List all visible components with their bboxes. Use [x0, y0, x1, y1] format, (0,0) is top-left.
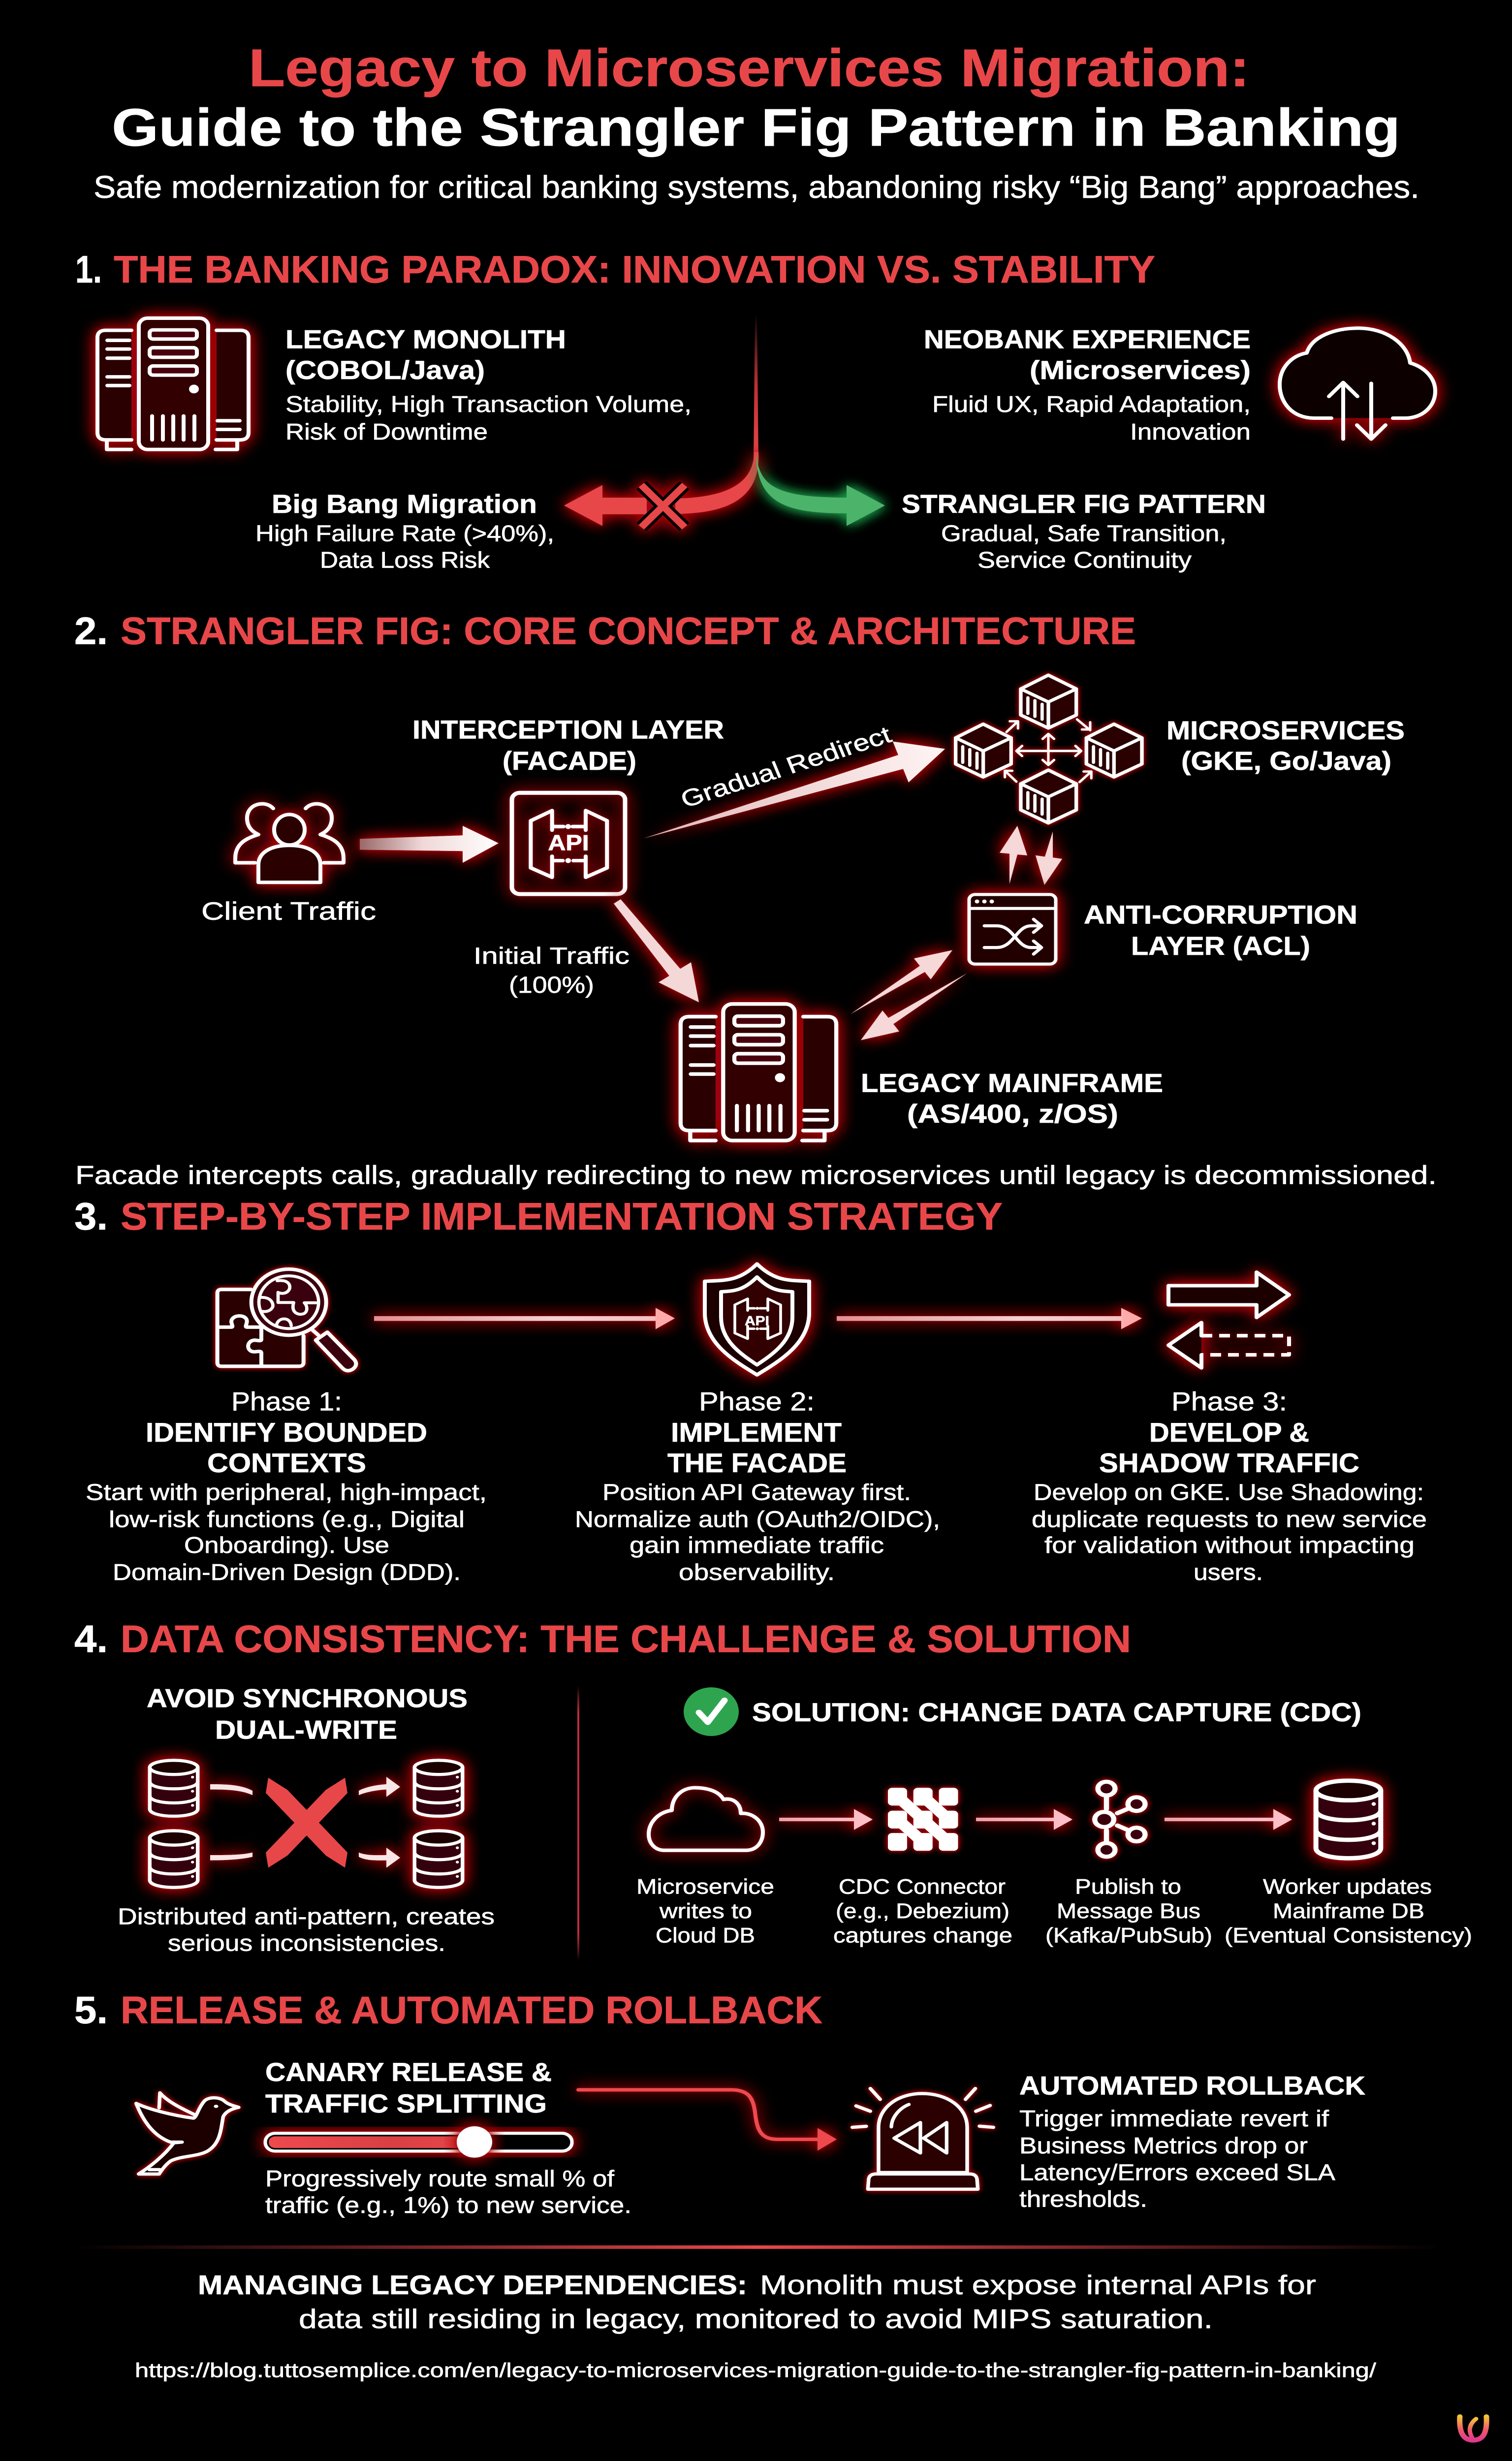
panel: dual-write anti-pattern [118, 1684, 495, 1956]
icon: green check [684, 1687, 739, 1736]
icon: puzzle and magnifier [218, 1269, 356, 1371]
text: automated rollback: Trigger immediate revert if [1019, 2107, 1329, 2131]
text: phase 3: DEVELOP & [1149, 1418, 1309, 1448]
text: big bang migration: Big Bang Migration [272, 489, 537, 518]
icon: legacy mainframe [681, 1004, 836, 1140]
text: canary release heading: CANARY RELEASE & [265, 2057, 552, 2086]
panel: section 4 data consistency [74, 1617, 1472, 1960]
text: phase 3: users. [1194, 1560, 1263, 1585]
text: worker step: Worker updates [1263, 1875, 1432, 1898]
text: microservice step: Cloud DB [656, 1924, 755, 1947]
text: big bang migration: High Failure Rate (>40%), [255, 521, 554, 546]
panel: section 5 release and rollback [74, 1989, 1365, 2218]
text: connector step: CDC Connector [839, 1875, 1006, 1898]
text: connector step: captures change [833, 1924, 1012, 1947]
arrow: phase 2 to phase 3 [837, 1308, 1142, 1329]
text: microservice step: Microservice [636, 1875, 774, 1898]
text: phase 3: Phase 3: [1171, 1387, 1287, 1416]
arrows: ACL and microservices exchange [1000, 826, 1062, 885]
text: connector step [833, 1875, 1012, 1947]
arrows: dual writes [210, 1777, 400, 1868]
text: neobank experience [924, 325, 1251, 444]
text: phase 1: low-risk functions (e.g., Digital [109, 1507, 465, 1532]
text: phase 2: Position API Gateway first. [602, 1480, 911, 1505]
text: publish step [1045, 1875, 1212, 1947]
heading: section 2: 2. [74, 610, 108, 653]
text: neobank experience: (Microservices) [1030, 355, 1251, 384]
text: strangler fig pattern [902, 489, 1266, 573]
label: microservices: (GKE, Go/Java) [1181, 746, 1391, 775]
text: phase 2: IMPLEMENT [671, 1418, 842, 1448]
text: phase 2: observability. [679, 1560, 835, 1585]
text: phase 3 [1032, 1387, 1427, 1585]
label: anti-corruption layer [1084, 900, 1357, 960]
text: neobank experience: NEOBANK EXPERIENCE [924, 325, 1251, 354]
icon: source databases [150, 1761, 198, 1888]
arrow: connector to bus [976, 1809, 1072, 1830]
label: client traffic: Client Traffic [201, 897, 376, 925]
icon: anti-corruption layer [969, 894, 1056, 964]
text: legacy monolith [285, 325, 692, 444]
arrow: cloud to connector [779, 1809, 873, 1830]
panel: section 1 banking paradox [75, 248, 1435, 573]
title [112, 38, 1400, 157]
heading: avoid dual-write: AVOID SYNCHRONOUS [147, 1684, 468, 1713]
label: legacy mainframe [861, 1069, 1163, 1128]
text: automated rollback: AUTOMATED ROLLBACK [1019, 2071, 1365, 2100]
text: canary release heading [265, 2057, 552, 2118]
text: phase 3: duplicate requests to new service [1032, 1507, 1427, 1532]
heading: section 2: STRANGLER FIG: CORE CONCEPT & ARCHITECTURE [121, 610, 1136, 653]
label: interception layer: INTERCEPTION LAYER [412, 715, 724, 744]
title: Guide to the Strangler Fig Pattern in Banking [112, 98, 1400, 157]
icon: microservices cubes [956, 675, 1142, 823]
text: worker step: (Eventual Consistency) [1225, 1924, 1472, 1947]
heading: section 1: 1. [75, 248, 102, 291]
text: microservice step [636, 1875, 774, 1947]
text: neobank experience: Fluid UX, Rapid Adaptation, [932, 392, 1251, 417]
text: worker step [1225, 1875, 1472, 1947]
text: legacy monolith: Stability, High Transaction Volume, [285, 392, 692, 417]
text: canary description [265, 2167, 631, 2218]
arrow: facade to legacy [614, 899, 699, 1002]
arrow: phase 1 to phase 2 [374, 1308, 675, 1329]
text: automated rollback: Latency/Errors exceed SLA [1019, 2160, 1335, 2185]
label: microservices: MICROSERVICES [1166, 716, 1405, 745]
text: canary description: Progressively route small % of [265, 2167, 614, 2191]
icon: cloud DB [649, 1788, 763, 1850]
callout: managing legacy dependencies: Monolith must expose internal APIs for [760, 2270, 1316, 2300]
text: phase 2: Normalize auth (OAuth2/OIDC), [575, 1507, 940, 1532]
text: phase 1: Domain-Driven Design (DDD). [113, 1560, 461, 1585]
icon: brand logo [1460, 2417, 1486, 2440]
callout: managing legacy dependencies: data still residing in legacy, monitored to avoid MIPS saturation. [299, 2304, 1213, 2334]
label: legacy mainframe: LEGACY MAINFRAME [861, 1069, 1163, 1098]
label: interception layer [412, 715, 724, 775]
text: connector step: (e.g., Debezium) [836, 1899, 1009, 1923]
text: facade summary: Facade intercepts calls, gradually redirecting to new microservices until legacy is decommissioned. [75, 1161, 1437, 1190]
text: canary description: traffic (e.g., 1%) to new service. [265, 2193, 631, 2218]
heading: avoid dual-write [147, 1684, 468, 1744]
heading: CDC solution: SOLUTION: CHANGE DATA CAPTURE (CDC) [752, 1698, 1361, 1727]
icon: CDC connector [888, 1788, 958, 1851]
label: legacy mainframe: (AS/400, z/OS) [907, 1099, 1118, 1128]
text: legacy monolith: (COBOL/Java) [285, 355, 485, 384]
panel: section 2 core concept and architecture [74, 610, 1437, 1190]
label: initial traffic [473, 943, 630, 998]
arrows: legacy and ACL exchange [850, 950, 967, 1040]
text: neobank experience: Innovation [1130, 420, 1251, 444]
arrow: client to facade [360, 826, 499, 863]
text: phase 2: gain immediate traffic [630, 1533, 884, 1558]
text: phase 3: Develop on GKE. Use Shadowing: [1034, 1480, 1424, 1505]
text: phase 2: Phase 2: [699, 1387, 815, 1416]
source URL: https://blog.tuttosemplice.com/en/legacy-to-microservices-migration-guide-to-the-strangler-fig-pattern-in-banking/ [135, 2360, 1377, 2382]
chart: traffic slider [265, 2126, 572, 2158]
icon: API facade [512, 793, 625, 894]
text: canary release heading: TRAFFIC SPLITTING [265, 2089, 547, 2118]
icon: API shield [705, 1264, 809, 1375]
label: gradual redirect: Gradual Redirect [677, 721, 895, 813]
text: phase 1 [86, 1387, 487, 1585]
text: automated rollback [1019, 2071, 1365, 2212]
text: phase 1: Phase 1: [231, 1387, 342, 1416]
label: anti-corruption layer: LAYER (ACL) [1131, 931, 1310, 960]
callout: managing legacy dependencies [198, 2270, 1316, 2334]
text: microservice step: writes to [659, 1899, 752, 1923]
label: initial traffic: Initial Traffic [473, 943, 630, 969]
text: strangler fig pattern: Gradual, Safe Transition, [941, 521, 1227, 546]
label: anti-corruption layer: ANTI-CORRUPTION [1084, 900, 1357, 929]
label: microservices [1166, 716, 1405, 775]
text: big bang migration [255, 489, 554, 573]
arrow: canary to rollback [578, 2090, 837, 2150]
heading: section 1: THE BANKING PARADOX: INNOVATION VS. STABILITY [114, 248, 1155, 291]
text: anti-pattern note: serious inconsistencies. [168, 1931, 445, 1956]
subtitle: Safe modernization for critical banking systems, abandoning risky “Big Bang” approaches. [94, 170, 1419, 205]
text: phase 1: Start with peripheral, high-impact, [86, 1480, 487, 1505]
text: phase 1: Onboarding). Use [184, 1533, 389, 1558]
text: phase 1: IDENTIFY BOUNDED [146, 1418, 427, 1448]
panel: section 3 implementation strategy [74, 1195, 1427, 1585]
arrow: bus to worker [1165, 1809, 1292, 1830]
text: publish step: Message Bus [1057, 1899, 1200, 1923]
arrow: failed big bang path [564, 452, 758, 527]
text: publish step: (Kafka/PubSub) [1045, 1924, 1212, 1947]
panel: CDC solution [636, 1687, 1472, 1947]
icon: rollback alarm [852, 2088, 993, 2189]
text: phase 3: SHADOW TRAFFIC [1099, 1448, 1359, 1478]
text: anti-pattern note [118, 1904, 495, 1956]
text: phase 2 [575, 1387, 940, 1585]
label: initial traffic: (100%) [509, 972, 594, 998]
heading: avoid dual-write: DUAL-WRITE [215, 1715, 397, 1744]
text: worker step: Mainframe DB [1273, 1899, 1424, 1923]
icon: mainframe database [1316, 1781, 1381, 1858]
icon: red cross [266, 1778, 347, 1868]
icon: client users [235, 804, 344, 883]
text: strangler fig pattern: Service Continuity [977, 548, 1192, 573]
icon: legacy server [97, 318, 249, 449]
text: anti-pattern note: Distributed anti-pattern, creates [118, 1904, 495, 1929]
label: interception layer: (FACADE) [503, 746, 636, 775]
heading: section 4: DATA CONSISTENCY: THE CHALLENGE & SOLUTION [121, 1617, 1131, 1660]
icon: API shield: API [745, 1313, 769, 1328]
title: Legacy to Microservices Migration: [249, 38, 1250, 97]
text: publish step: Publish to [1075, 1875, 1181, 1898]
arrow: gradual redirect [643, 742, 945, 838]
icon: target databases [414, 1761, 463, 1888]
text: automated rollback: thresholds. [1019, 2187, 1147, 2212]
text: legacy monolith: LEGACY MONOLITH [285, 325, 566, 354]
callout: managing legacy dependencies: MANAGING LEGACY DEPENDENCIES: [198, 2270, 747, 2300]
text: legacy monolith: Risk of Downtime [285, 420, 488, 444]
icon: API facade: API [548, 830, 589, 855]
heading: section 3: STEP-BY-STEP IMPLEMENTATION STRATEGY [121, 1195, 1003, 1238]
text: big bang migration: Data Loss Risk [320, 548, 490, 573]
heading: section 5: 5. [74, 1989, 108, 2032]
arrow: strangler fig path [756, 456, 885, 526]
text: phase 3: for validation without impacting [1044, 1533, 1415, 1558]
text: strangler fig pattern: STRANGLER FIG PATTERN [902, 489, 1266, 518]
icon: shadow traffic arrows [1168, 1272, 1289, 1368]
text: automated rollback: Business Metrics drop or [1019, 2134, 1308, 2158]
text: phase 1: CONTEXTS [207, 1448, 366, 1478]
icon: canary bird [136, 2093, 239, 2174]
heading: section 3: 3. [74, 1195, 108, 1238]
icon: cloud with up and down arrows [1280, 328, 1435, 439]
heading: section 4: 4. [74, 1617, 108, 1660]
text: phase 2: THE FACADE [667, 1448, 847, 1478]
diagram: decision split line [754, 314, 758, 461]
icon: Kafka message bus [1095, 1782, 1145, 1857]
heading: section 5: RELEASE & AUTOMATED ROLLBACK [121, 1989, 822, 2032]
